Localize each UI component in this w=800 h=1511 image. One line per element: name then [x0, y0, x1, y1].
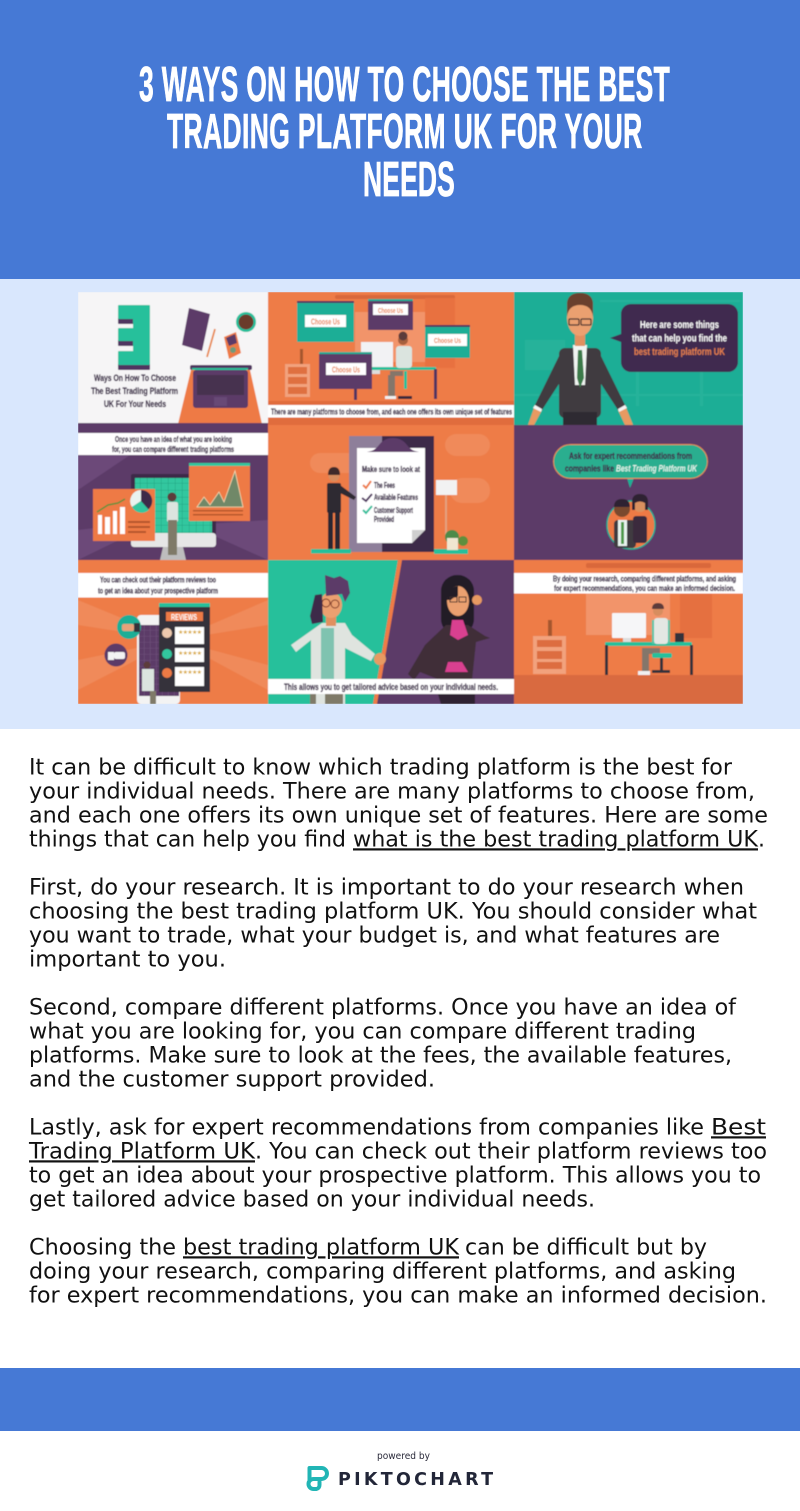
sign: choose us 3: Choose Us [332, 366, 360, 374]
body text [28, 755, 768, 1308]
phone with purple grid [137, 615, 180, 704]
header band [0, 0, 800, 279]
paragraph 3: what you are looking for, you can compare different trading [29, 1019, 696, 1044]
checklist text: Available Features [374, 493, 418, 502]
caption strip: There are many platforms to choose from, and each one offers its own unique set of features [271, 406, 512, 416]
paragraph 5: Choosing the [29, 1235, 176, 1260]
paragraph 2: important to you. [29, 947, 226, 972]
callout: speech bubble: that can help you find the [632, 332, 727, 344]
panel: checklist [268, 425, 514, 560]
paragraph 5: for expert recommendations, you can make an informed decision. [29, 1283, 767, 1308]
callout: recommendation bubble: Best Trading Platform UK [616, 464, 698, 474]
heading: intro text: UK For Your Needs [104, 399, 166, 410]
paragraph 2: you want to trade, what your budget is, and what features are [29, 923, 720, 948]
paragraph 5: best trading platform UK [183, 1235, 460, 1260]
checklist text: Customer Support [374, 506, 413, 515]
sign: choose us 2: Choose Us [378, 306, 403, 315]
icon: phone [224, 332, 241, 359]
powered by Piktochart logo: PIKTOCHART [338, 1470, 493, 1490]
reviews board: ★★★★★ [178, 669, 202, 676]
experts in circle [607, 494, 655, 549]
sign: choose us 4: Choose Us [434, 336, 461, 345]
caption strip [268, 405, 514, 418]
background window [514, 300, 743, 406]
paragraph 3: and the customer support provided. [29, 1067, 435, 1092]
drawer cabinet [533, 620, 566, 674]
image band [0, 279, 800, 729]
icon: big number 3 [119, 306, 149, 369]
callout: recommendation bubble: Ask for expert recommendations from [569, 451, 692, 462]
sign: choose us 1: Choose Us [311, 318, 340, 326]
checklist text: Make sure to look at [362, 464, 420, 474]
paragraph 3: platforms. Make sure to look at the fees, the available features, [29, 1043, 732, 1068]
paragraph 4: to get an idea about your prospective platform. This allows you to [29, 1163, 761, 1188]
callout: recommendation bubble: companies like [565, 464, 614, 474]
paragraph 1 [29, 755, 768, 852]
paragraph 4: get tailored advice based on your individual needs. [29, 1187, 595, 1212]
paragraph 4: Lastly, ask for expert recommendations from companies like [29, 1115, 704, 1140]
panel: expert recommendations [514, 425, 743, 560]
callout: speech bubble [610, 304, 738, 372]
reviews board: ★★★★★ [178, 629, 202, 636]
paragraph 5: doing your research, comparing different platforms, and asking [29, 1259, 736, 1284]
floor strip [311, 549, 351, 554]
footer band [0, 1368, 800, 1431]
drawer cabinet [285, 349, 310, 397]
checklist text [362, 464, 420, 524]
caption strip: This allows you to get tailored advice based on your individual needs. [284, 682, 498, 693]
caption strip: for, you can compare different trading platforms [112, 444, 234, 454]
reviews board: REVIEWS [171, 613, 197, 622]
paragraph 3: Second, compare different platforms. Once you have an idea of [29, 995, 737, 1020]
icon: thumbs down [104, 644, 128, 666]
powered by Piktochart logo [308, 1451, 493, 1490]
paragraph 2 [29, 875, 757, 972]
panel: speaker with speech bubble [514, 292, 743, 425]
heading: intro text: The Best Trading Platform [91, 386, 178, 397]
title: TRADING PLATFORM UK FOR YOUR [167, 104, 642, 159]
paragraph 5: can be difficult but by [465, 1235, 707, 1260]
floor lamp [436, 480, 457, 535]
callout: recommendation bubble [554, 444, 708, 488]
caption strip [78, 433, 268, 455]
man on phone [291, 575, 386, 704]
panel: compare platforms [78, 423, 268, 560]
heading: intro text [91, 373, 178, 410]
analyst figure [167, 492, 178, 555]
checklist text: Provided [374, 515, 394, 524]
monitor with grid [131, 474, 216, 560]
caption strip [514, 573, 743, 594]
icon: thumbs up [117, 615, 141, 639]
heading: intro text: Ways On How To Choose [94, 373, 176, 384]
title: 3 WAYS ON HOW TO CHOOSE THE BEST [139, 57, 670, 112]
sign: choose us 1 [297, 301, 354, 342]
powered by Piktochart logo: powered by [377, 1451, 430, 1462]
caption strip [268, 679, 514, 694]
callout: speech bubble: Here are some things [640, 319, 719, 331]
reviews board [159, 603, 210, 692]
sign: choose us 4 [425, 325, 470, 358]
man at desk on phone [638, 603, 672, 675]
caption strip [78, 573, 268, 598]
potted plant [445, 530, 468, 550]
paragraph 4: Trading Platform UK [28, 1139, 256, 1164]
panel: tailored advice [268, 560, 514, 704]
curtain and wall window [335, 295, 455, 368]
caption strip: to get an idea about your prospective platform [98, 586, 218, 596]
paragraph 5 [29, 1235, 767, 1308]
businessman pointing [323, 467, 356, 552]
paragraph 1: It can be difficult to know which trading platform is the best for [29, 755, 733, 780]
sign: choose us 3 [319, 352, 372, 400]
businessman [528, 293, 633, 425]
bar chart card [93, 489, 155, 541]
paragraph 4: . You can check out their platform reviews too [255, 1139, 767, 1164]
title [139, 57, 670, 207]
reviews board: ★★★★★ [178, 650, 202, 657]
paragraph 2: First, do your research. It is important to do your research when [29, 875, 744, 900]
man at desk [361, 332, 437, 399]
callout: speech bubble: best trading platform UK [634, 346, 725, 358]
icon: checkmarks [362, 481, 372, 513]
paragraph 4 [28, 1115, 767, 1212]
panel: many platforms [268, 292, 514, 425]
paragraph 3 [29, 995, 737, 1092]
paragraph 1: and each one offers its own unique set of features. Here are some [29, 803, 768, 828]
panel: intro title card [78, 292, 268, 425]
checklist text: The Fees [374, 481, 395, 490]
laptop on desk [178, 365, 262, 424]
paragraph 1: your individual needs. There are many platforms to choose from, [29, 779, 755, 804]
woman on phone [408, 575, 490, 704]
icon: coffee cup [236, 312, 256, 332]
paragraph 1: . [758, 827, 765, 852]
caption strip: Once you have an idea of what you are looking [115, 434, 232, 444]
caption strip: You can check out their platform reviews too [100, 574, 216, 584]
icon: Piktochart mark [308, 1468, 327, 1489]
sign: choose us 2 [368, 299, 413, 330]
paragraph 4: Best [711, 1115, 766, 1140]
area chart card [189, 463, 250, 521]
paragraph 1: what is the best trading platform UK [353, 827, 759, 852]
title: NEEDS [363, 152, 455, 207]
illustration collage [78, 292, 743, 704]
clipboard [349, 436, 434, 552]
desk and computer [605, 613, 693, 675]
panel: informed decision [514, 560, 743, 704]
icon: pencil [207, 329, 215, 357]
panel: platform reviews [78, 560, 268, 704]
paragraph 2: choosing the best trading platform UK. You should consider what [29, 899, 757, 924]
paragraph 1: things that can help you find [29, 827, 346, 852]
icon: notebook [182, 308, 210, 351]
